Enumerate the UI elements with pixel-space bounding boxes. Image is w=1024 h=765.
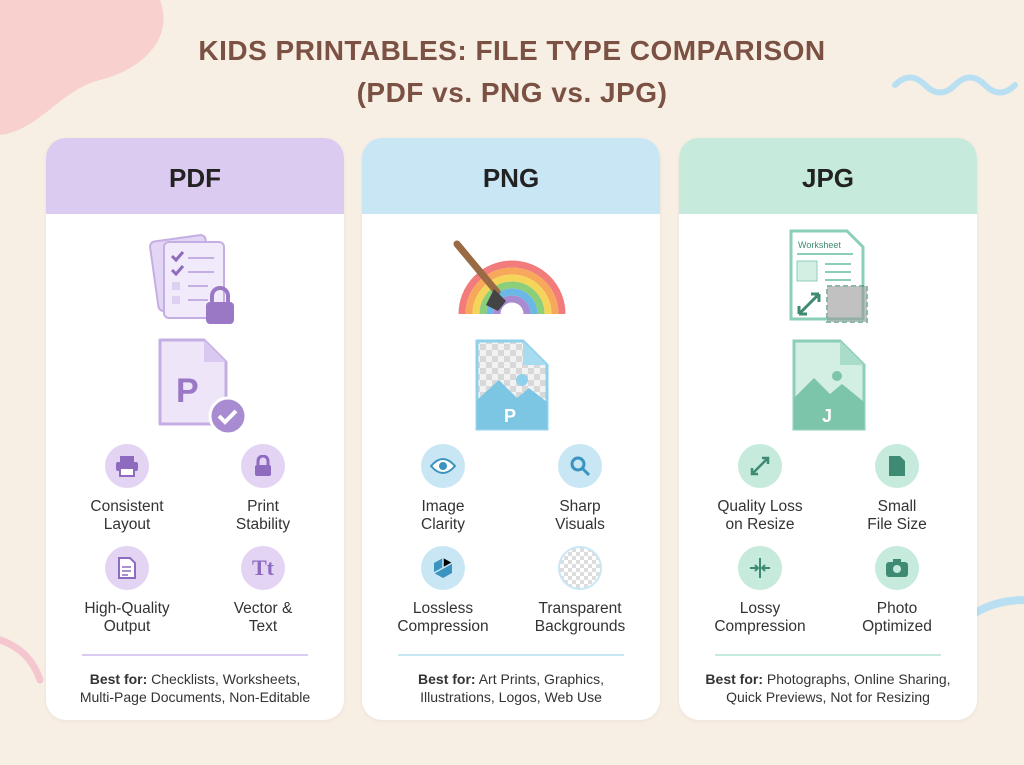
feature: Lossless Compression	[397, 546, 489, 635]
heading: JPG: JPG	[802, 163, 854, 193]
text: best for PDF: Multi-Page Documents, Non-Editable	[80, 689, 310, 705]
text: best for PDF: Best for: Checklists, Worksheets,	[90, 671, 300, 687]
text: best for PNG: Illustrations, Logos, Web Use	[420, 689, 602, 705]
icon: worksheet resize	[790, 230, 868, 323]
heading: JPG	[679, 138, 977, 214]
icon: PNG file	[476, 340, 548, 430]
decoration: pink blob	[0, 0, 164, 135]
heading: PDF	[46, 138, 344, 214]
feature: Vector & Text	[234, 546, 292, 635]
feature: Lossy Compression	[714, 546, 806, 635]
icon: rainbow and brush	[454, 240, 566, 314]
feature: Image Clarity: Clarity	[421, 516, 465, 533]
feature: Lossless Compression: Lossless	[413, 600, 473, 617]
feature: Vector & Text: Vector &	[234, 600, 292, 617]
text: best for PNG	[418, 671, 604, 705]
feature: Transparent Backgrounds	[535, 546, 625, 635]
text: best for PNG: Best for: Art Prints, Graphics,	[418, 671, 604, 687]
feature: Quality Loss on Resize: on Resize	[726, 516, 794, 533]
feature: Consistent Layout	[90, 444, 164, 533]
feature: Consistent Layout: Layout	[104, 516, 150, 533]
feature: Image Clarity: Image	[421, 498, 465, 515]
feature: High-Quality Output: Output	[104, 618, 150, 635]
feature: Lossy Compression: Lossy	[740, 600, 780, 617]
feature: Sharp Visuals: Sharp	[559, 498, 601, 515]
feature: Lossy Compression: Compression	[714, 618, 806, 635]
decoration: blue waves	[892, 74, 1018, 96]
feature: Photo Optimized	[862, 546, 932, 635]
icon: JPG file: J	[822, 406, 832, 426]
feature: Print Stability: Print	[247, 498, 279, 515]
icon: checklist with lock	[149, 234, 234, 324]
icon: PDF file with check: P	[176, 372, 199, 410]
text: best for PDF	[80, 671, 310, 705]
feature: Transparent Backgrounds: Backgrounds	[535, 618, 625, 635]
icon: PNG file: P	[504, 406, 516, 426]
heading: PDF: PDF	[169, 163, 221, 193]
panel: PNG	[362, 138, 660, 720]
feature: Transparent Backgrounds: Transparent	[538, 600, 622, 617]
feature: Sharp Visuals: Visuals	[555, 516, 605, 533]
feature: Image Clarity	[421, 444, 465, 533]
title	[198, 35, 826, 108]
feature: Print Stability: Stability	[236, 516, 290, 533]
icon: JPG file	[792, 340, 866, 430]
feature: Small File Size: Small	[878, 498, 916, 515]
feature: Consistent Layout: Consistent	[90, 498, 164, 515]
feature: High-Quality Output: High-Quality	[84, 600, 170, 617]
heading: PNG	[362, 138, 660, 214]
feature: Quality Loss on Resize: Quality Loss	[717, 498, 803, 515]
panel: JPG	[679, 138, 977, 720]
feature: Vector & Text: Tt	[252, 555, 274, 580]
feature: High-Quality Output	[84, 546, 170, 635]
title: (PDF vs. PNG vs. JPG)	[357, 77, 667, 108]
feature: Photo Optimized: Photo	[877, 600, 917, 617]
icon: worksheet resize: Worksheet	[798, 240, 841, 250]
icon: PDF file with check	[158, 338, 244, 432]
text: best for JPG: Quick Previews, Not for Resizing	[726, 689, 930, 705]
text: best for JPG: Best for: Photographs, Online Sharing,	[705, 671, 951, 687]
feature: Quality Loss on Resize	[717, 444, 803, 533]
text: best for JPG	[705, 671, 951, 705]
title: KIDS PRINTABLES: FILE TYPE COMPARISON	[198, 35, 826, 66]
feature: Sharp Visuals	[555, 444, 605, 533]
feature: Print Stability	[236, 444, 290, 533]
feature: Vector & Text: Text	[249, 618, 277, 635]
feature: Small File Size	[867, 444, 927, 533]
panel: PDF	[46, 138, 344, 720]
feature: Lossless Compression: Compression	[397, 618, 489, 635]
feature: Small File Size: File Size	[867, 516, 927, 533]
heading: PNG: PNG	[483, 163, 539, 193]
feature: Photo Optimized: Optimized	[862, 618, 932, 635]
